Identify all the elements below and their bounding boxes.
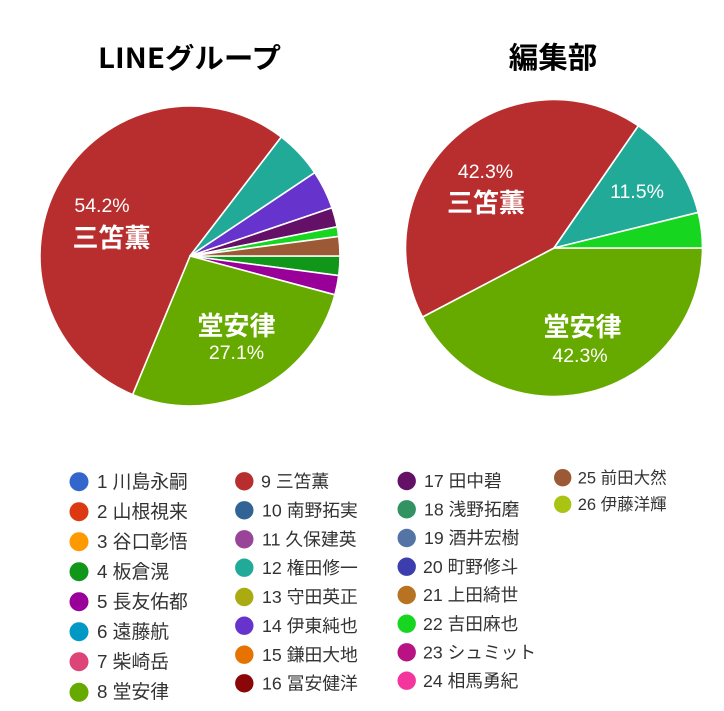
label: Dou Anritsu 42.3%: 堂安律 bbox=[543, 307, 622, 344]
legend: column 1: 8 堂安律 bbox=[97, 681, 169, 702]
legend: column 2: 10 南野拓実 bbox=[262, 500, 358, 520]
legend: column 4: 26 伊藤洋輝 bbox=[578, 495, 667, 514]
legend: column 1: 3 谷口彰悟 bbox=[97, 531, 188, 552]
legend: column 3: 18 浅野拓磨 bbox=[424, 500, 520, 520]
label: Misato Kaoru 42.3%: 42.3% bbox=[458, 161, 513, 183]
legend: column 3: 20 町野修斗 bbox=[423, 557, 518, 577]
legend: column 4 bbox=[554, 468, 667, 514]
label: Dou Anritsu 27.1% bbox=[197, 306, 276, 364]
label: Misato Kaoru 54.2%: 三笘薫 bbox=[72, 218, 151, 255]
legend: column 3 bbox=[398, 471, 536, 691]
legend: column 2: 9 三笘薫 bbox=[261, 472, 329, 492]
label: Dou Anritsu 27.1%: 堂安律 bbox=[197, 306, 276, 343]
legend: column 1: 7 柴崎岳 bbox=[97, 651, 169, 672]
legend: column 2: 11 久保建英 bbox=[262, 530, 357, 550]
legend: column 2: 14 伊東純也 bbox=[262, 616, 358, 636]
legend: column 1 bbox=[70, 471, 188, 702]
legend: column 2: 16 冨安健洋 bbox=[262, 674, 358, 694]
legend: column 3: 19 酒井宏樹 bbox=[424, 528, 519, 548]
heading: editorial department: 編集部 bbox=[509, 35, 597, 77]
legend: column 1: 6 遠藤航 bbox=[97, 621, 169, 642]
legend: column 1: 2 山根視来 bbox=[97, 501, 188, 522]
label: Misato Kaoru 42.3% bbox=[447, 161, 525, 220]
label: Misato Kaoru 54.2%: 54.2% bbox=[74, 195, 130, 217]
legend: column 4: 25 前田大然 bbox=[578, 468, 667, 488]
legend: column 2: 12 権田修一 bbox=[262, 558, 358, 578]
legend: column 3: 17 田中碧 bbox=[424, 471, 502, 491]
legend: column 1: 5 長友佑都 bbox=[97, 591, 188, 612]
legend: column 1: 1 川島永嗣 bbox=[97, 471, 188, 492]
legend: column 2 bbox=[235, 472, 358, 694]
legend: column 3: 21 上田綺世 bbox=[423, 585, 518, 605]
pie chart: LINE group bbox=[40, 106, 340, 406]
pie chart: editorial department bbox=[406, 100, 702, 396]
heading: LINE group: LINEグループ bbox=[98, 37, 281, 77]
label: Dou Anritsu 42.3% bbox=[543, 307, 622, 367]
legend: column 2: 15 鎌田大地 bbox=[262, 645, 358, 665]
legend: column 3: 23 シュミット bbox=[423, 642, 536, 662]
label: Dou Anritsu 27.1%: 27.1% bbox=[209, 342, 264, 364]
legend: column 1: 4 板倉滉 bbox=[97, 561, 169, 582]
label: Misato Kaoru 54.2% bbox=[72, 195, 151, 255]
label: Misato Kaoru 42.3%: 三笘薫 bbox=[447, 183, 525, 220]
legend: column 3: 24 相馬勇紀 bbox=[423, 671, 519, 691]
label: Dou Anritsu 42.3%: 42.3% bbox=[552, 345, 608, 367]
legend: column 3: 22 吉田麻也 bbox=[423, 614, 518, 634]
legend: column 2: 13 守田英正 bbox=[262, 587, 358, 607]
label: 11.5%: 11.5% bbox=[610, 181, 664, 203]
